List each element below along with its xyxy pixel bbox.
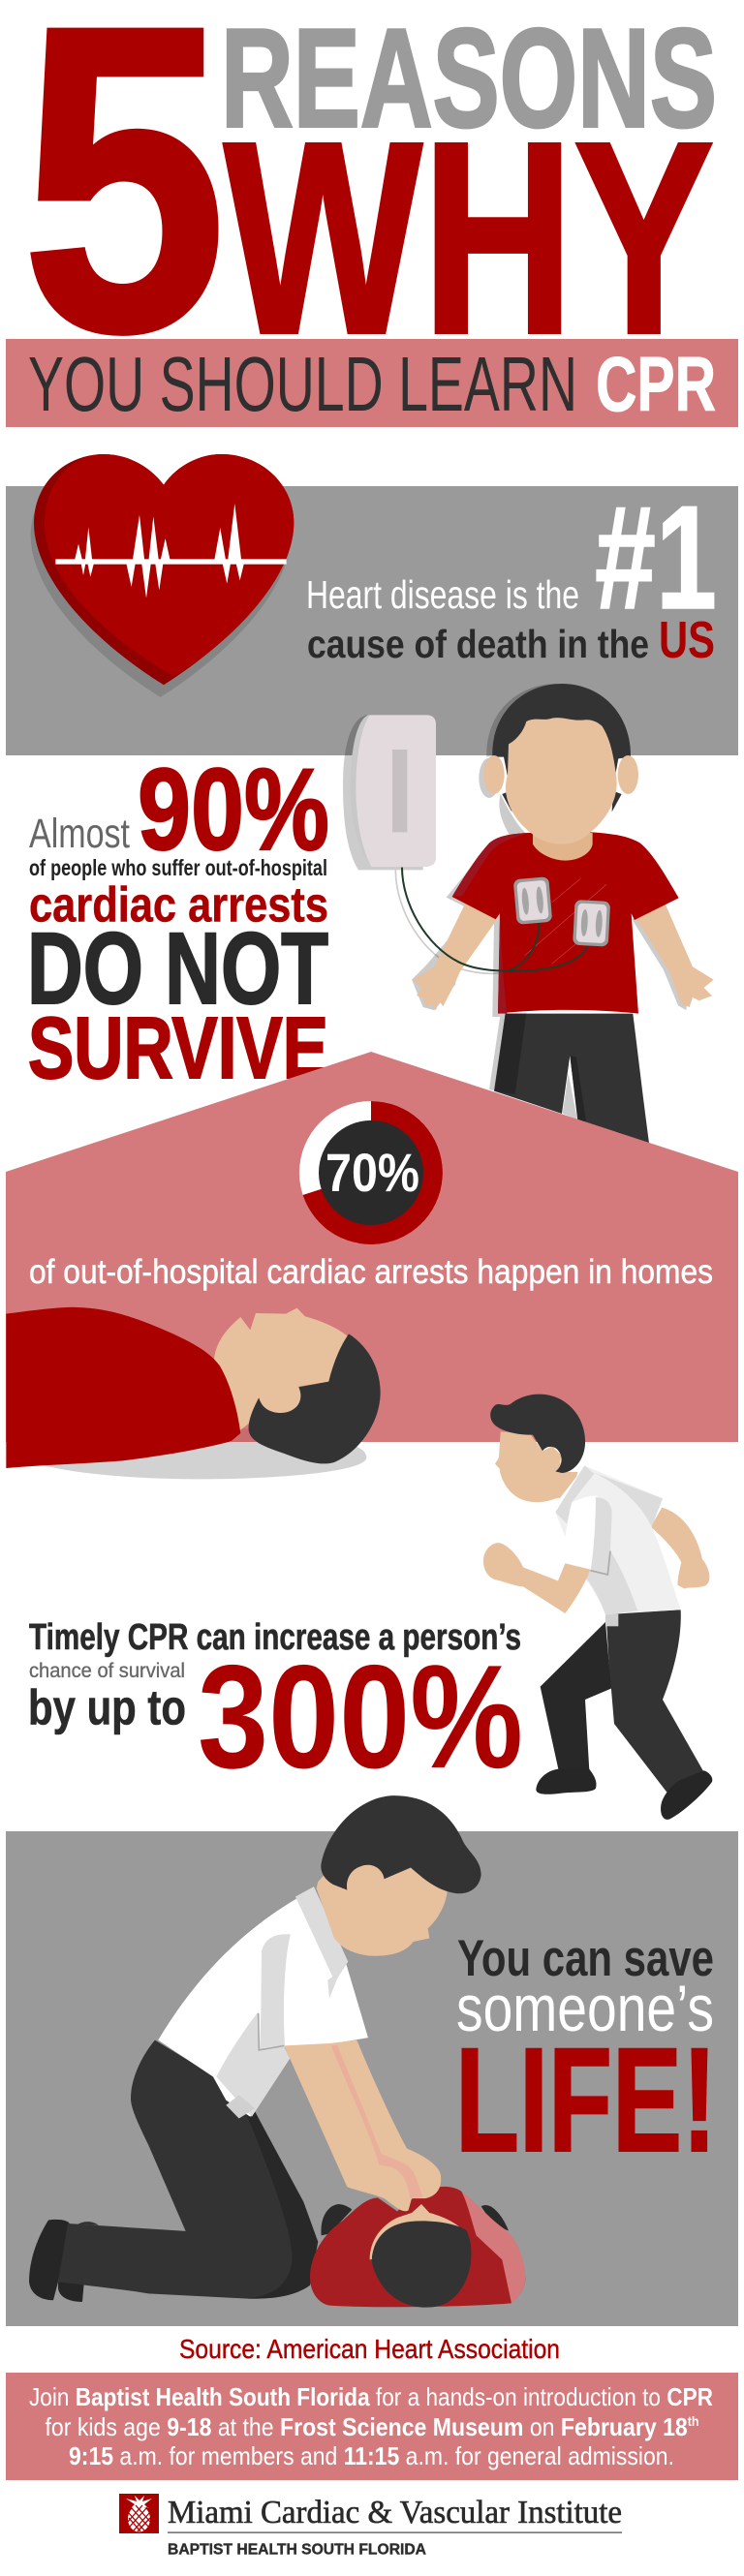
panel: you can save xyxy=(6,1795,738,2326)
logo xyxy=(119,2494,622,2559)
logo subline: BAPTIST HEALTH SOUTH FLORIDA xyxy=(168,2541,426,2559)
running man trousers xyxy=(536,1610,712,1820)
rescuer shirt xyxy=(158,1886,368,2119)
subtitle band xyxy=(6,339,738,427)
rescuer legs xyxy=(29,2040,318,2302)
text block: timely cpr xyxy=(28,1617,523,1799)
text: heart disease is the: Heart disease is the xyxy=(306,572,579,617)
text: almost: Almost xyxy=(29,811,130,857)
icon: pineapple xyxy=(119,2494,159,2533)
text: survive: SURVIVE xyxy=(28,1000,328,1097)
person arms xyxy=(413,901,714,1010)
text: 90%: 90% xyxy=(138,745,329,874)
panel: event details xyxy=(6,2373,738,2480)
source line: Source: American Heart Association xyxy=(179,2334,560,2364)
running man front arm xyxy=(483,1543,590,1613)
text: US: US xyxy=(659,611,715,669)
text: timely cpr: Timely CPR can increase a person’s xyxy=(29,1617,521,1658)
text: cardiac arrests: cardiac arrests xyxy=(29,877,328,932)
electrode pads and wires xyxy=(402,868,610,971)
chart: 70 percent donut xyxy=(299,1101,443,1244)
event line 2: th xyxy=(688,2413,699,2429)
text block: 90 percent do not survive xyxy=(27,745,329,1097)
text: 70%: 70% xyxy=(326,1142,419,1203)
device: defibrillator xyxy=(343,715,499,973)
patient xyxy=(310,2187,525,2308)
person shadow xyxy=(412,684,688,1119)
running man head xyxy=(490,1395,585,1502)
running man back arm xyxy=(651,1508,709,1589)
event line 1: Join Baptist Health South Florida for a hands-on introduction to CPR xyxy=(29,2382,713,2411)
text: cause of death in the: cause of death in the xyxy=(307,622,649,666)
person head xyxy=(483,684,638,861)
text: by up to: by up to xyxy=(28,1679,186,1735)
text: do not: DO NOT xyxy=(27,912,328,1026)
person trousers xyxy=(494,1014,649,1143)
running man shirt xyxy=(555,1465,681,1614)
rescuer head xyxy=(317,1795,481,1956)
text: chance of survival: chance of survival xyxy=(29,1660,185,1682)
illustration: person with defibrillator xyxy=(343,684,714,1143)
rescuer arms xyxy=(284,2040,441,2211)
person t-shirt xyxy=(452,832,679,1014)
event line 3: 9:15 a.m. for members and 11:15 a.m. for general admission. xyxy=(69,2441,674,2470)
event line 2: for kids age 9-18 at the Frost Science Museum on February 18 xyxy=(45,2412,703,2441)
text: 300%: 300% xyxy=(198,1635,523,1799)
logo wordmark: Miami Cardiac & Vascular Institute xyxy=(168,2495,622,2530)
panel: heart disease xyxy=(6,454,738,755)
rescuer upper body xyxy=(158,1795,481,2211)
title xyxy=(21,0,717,422)
illustration: person running xyxy=(483,1395,712,1820)
icon: heart with heartbeat xyxy=(31,454,294,697)
text: of people: of people who suffer out-of-hospital xyxy=(29,855,327,880)
illustration: person lying down xyxy=(6,1307,381,1479)
panel: house xyxy=(6,1052,738,1442)
